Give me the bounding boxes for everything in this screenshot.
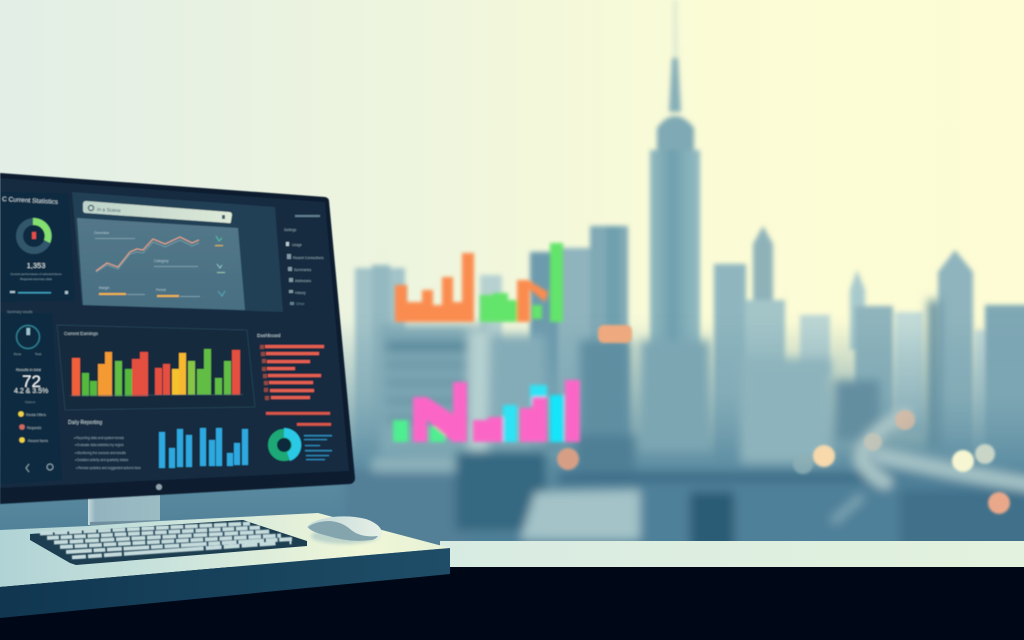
- big metric: Options: [25, 400, 36, 404]
- panel: right menu: Settings: [284, 228, 297, 232]
- panel: right menu: Recent Connections: [293, 256, 324, 260]
- screen: [0, 178, 349, 488]
- panel: lower left stats: [0, 310, 62, 484]
- panel: daily reporting list: ▪ Detailed activity and quarterly status: [75, 458, 129, 462]
- panel: daily reporting list: ▪ Monitoring the sources and results: [75, 451, 126, 455]
- city light bokeh: [557, 325, 1010, 514]
- blurred city skyline: [355, 0, 1024, 480]
- desk front face: [0, 548, 450, 618]
- chart labels: Overview: [94, 231, 109, 235]
- legend: Rental Offers: [26, 413, 46, 417]
- axis: [70, 394, 243, 396]
- panel: right menu: [284, 215, 324, 306]
- panel: daily reporting list: ▪ Review updates and suggested actions here: [76, 466, 141, 470]
- big metric: [14, 368, 48, 404]
- search bar: in a Scene: [97, 207, 121, 214]
- lower haze band: [0, 320, 1024, 560]
- panel: lower left stats: Summary results: [7, 310, 33, 314]
- legend: Recent Items: [28, 439, 48, 443]
- panel: right menu: History: [295, 291, 306, 295]
- monitor bezel: [0, 173, 355, 504]
- big metric: Results in total: [16, 368, 41, 372]
- distant buildings: [355, 226, 1024, 480]
- panel: central analytics: [72, 192, 283, 312]
- legend: Requests: [27, 426, 42, 430]
- panel: daily reporting list: ▪ Reporting data and system trends: [74, 436, 124, 440]
- city lower blocks: [0, 300, 1024, 560]
- monitor stand: [88, 495, 160, 530]
- ring gauge: Total: [35, 352, 42, 356]
- panel: daily reporting list: [68, 420, 141, 470]
- panel: ranked red bars: Dashboard: [257, 333, 281, 339]
- nav icons: [26, 464, 53, 472]
- big metric: 4.2 & 3.5%: [14, 388, 48, 395]
- elevated highway: [835, 415, 1024, 520]
- pale block: [741, 358, 831, 463]
- chart labels: Category: [154, 259, 169, 263]
- heading: Current Earnings: [64, 331, 99, 336]
- panel: colourful bar chart: [57, 325, 255, 410]
- chart labels: Margin: [99, 286, 109, 290]
- panel: top left gauge: Regional summary data: [20, 277, 52, 281]
- caption: Current performance of selected items: [10, 272, 62, 276]
- main tower: [650, 0, 700, 440]
- ring gauge: Done: [14, 352, 22, 356]
- side icons: [215, 236, 225, 296]
- mouse: [307, 516, 382, 544]
- desk top: [0, 513, 450, 587]
- donut legend lines: [304, 435, 332, 460]
- panel: top left gauge: [0, 192, 75, 302]
- chart labels: Period: [156, 288, 166, 292]
- heading: C Current Statistics: [2, 196, 59, 206]
- line chart: [96, 237, 199, 272]
- striped mid-rise: [380, 325, 710, 460]
- progress bars: [99, 293, 200, 297]
- chart labels: [94, 231, 198, 292]
- legend: [18, 411, 48, 443]
- slider: [10, 291, 68, 294]
- dark foreground: [0, 567, 1024, 640]
- big metric: 72: [22, 372, 41, 391]
- search bar: [83, 201, 232, 223]
- panel: right menu: Addresses: [295, 279, 311, 283]
- floating chart: orange and green bars: [395, 243, 563, 322]
- ground blocks: [345, 435, 1024, 560]
- panel: right menu: Other: [296, 302, 305, 306]
- value: 1,353: [27, 261, 45, 270]
- panel: right menu: Usage: [292, 243, 302, 247]
- blue bar chart: [159, 428, 248, 468]
- bars: [72, 349, 240, 396]
- back shelf: [440, 541, 1024, 567]
- ring gauge: [14, 326, 42, 356]
- panel: ranked red bars: [257, 333, 331, 426]
- donut chart: [272, 428, 301, 461]
- desk: [0, 513, 450, 618]
- panel: right menu: Summaries: [294, 268, 311, 272]
- donut gauge: [20, 218, 51, 250]
- monitor: [0, 173, 355, 504]
- keyboard: [30, 520, 307, 565]
- floating chart: pink, cyan and green bars: [393, 380, 580, 442]
- panel: daily reporting list: ▪ Evaluate data statistics by region: [75, 443, 124, 447]
- power button: [156, 484, 162, 490]
- panel: daily reporting list: Daily Reporting: [68, 420, 102, 426]
